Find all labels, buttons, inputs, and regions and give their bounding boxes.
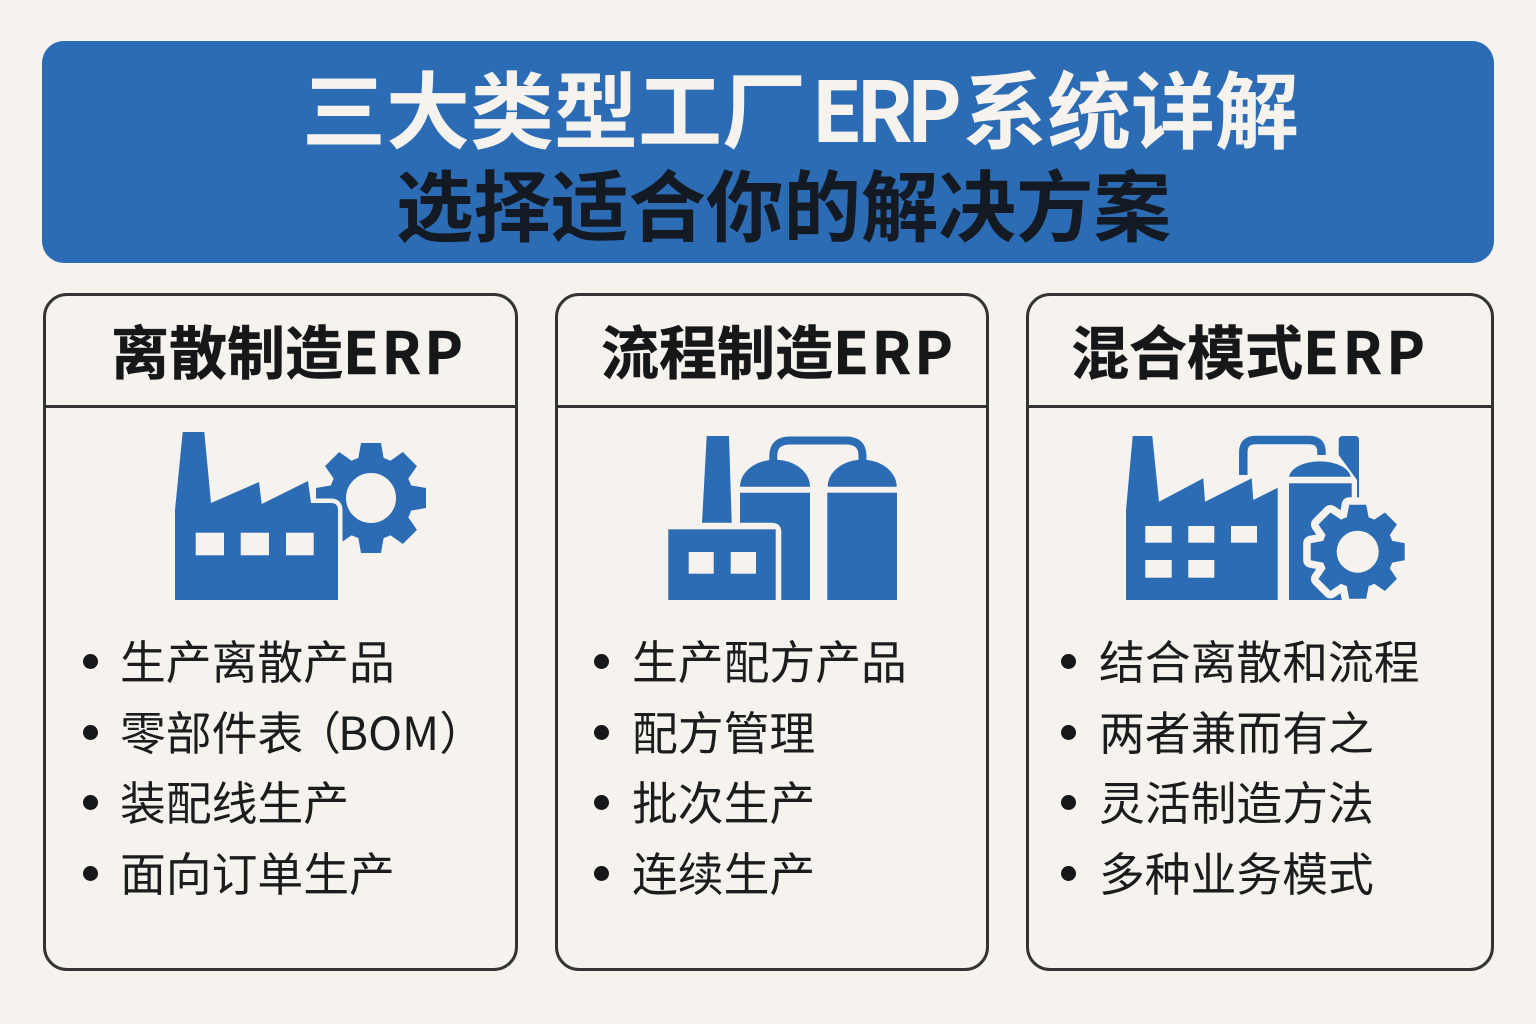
panel: hybrid mode ERP [1026,293,1494,971]
bullet item: 配方管理 [632,698,815,764]
title banner [42,41,1494,263]
icon: factory with gear [175,432,426,600]
panel heading: hybrid: 混合模式ERP [1071,307,1429,391]
bullet list: discrete [83,627,485,905]
bullet item: 两者兼而有之 [1099,698,1374,764]
panel heading: discrete: 离散制造ERP [111,307,466,391]
bullet item: 结合离散和流程 [1099,627,1420,693]
title line 2: 选择适合你的解决方案 [396,146,1171,258]
bullet item: 多种业务模式 [1099,839,1374,905]
panel: discrete manufacturing ERP [43,293,518,971]
icon: process plant with tanks [668,436,897,600]
bullet item: 灵活制造方法 [1099,768,1374,834]
bullet item: 面向订单生产 [120,839,395,905]
bullet item: 生产配方产品 [632,627,907,693]
bullet list: hybrid [1061,627,1420,905]
panel: process manufacturing ERP [555,293,989,971]
title line 1: 三大类型工厂ERP系统详解 [302,46,1299,167]
panel heading: process: 流程制造ERP [601,307,956,391]
bullet list: process [594,627,907,905]
bullet item: 装配线生产 [120,768,349,834]
bullet item: 连续生产 [632,839,815,905]
bullet item: 零部件表（BOM） [120,698,485,764]
bullet item: 批次生产 [632,768,815,834]
bullet item: 生产离散产品 [120,627,395,693]
icon: hybrid factory with tank and gear [1126,436,1405,600]
